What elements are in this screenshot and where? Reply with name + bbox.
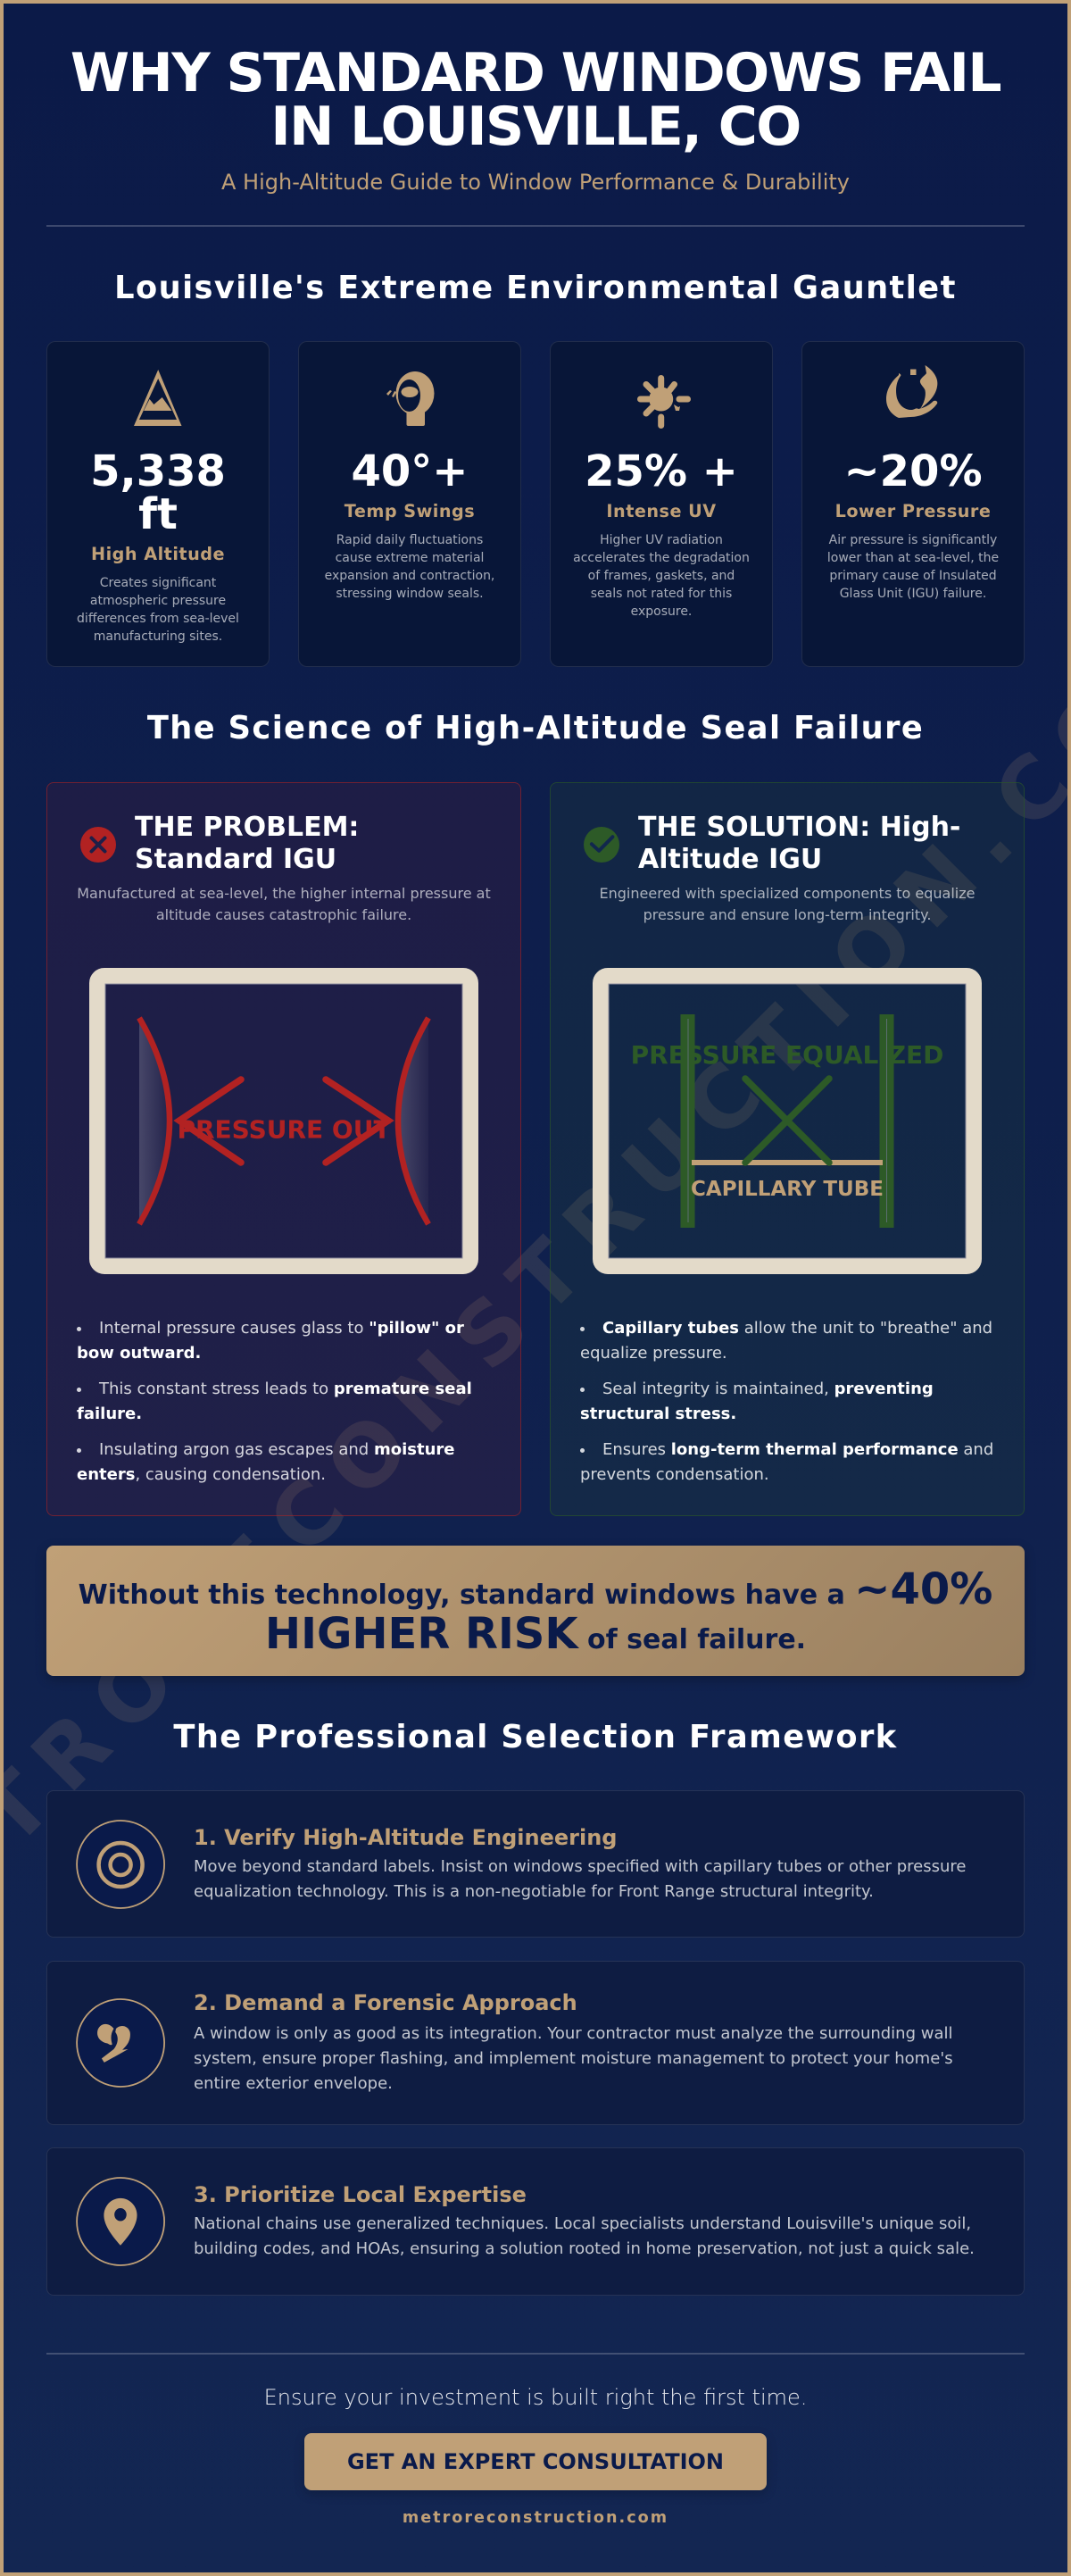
heading: selection framework: The Professional Selection Framework — [173, 1719, 898, 1755]
diagram: pressure equalized window — [593, 968, 982, 1274]
diagram: pressure equalized window: CAPILLARY TUBE — [691, 1178, 884, 1201]
stat description — [77, 576, 239, 644]
problem bullet list: Insulating argon gas escapes and moisture — [99, 1440, 454, 1459]
footer prompt: Ensure your investment is built right the first time. — [264, 2385, 807, 2410]
stat description: Rapid daily fluctuations — [336, 533, 483, 547]
step title: 2. Demand a Forensic Approach — [194, 1990, 577, 2015]
callout: 40 percent higher risk — [46, 1546, 1025, 1676]
step description: National chains use generalized techniques. Local specialists understand Louisville's unique soil, — [194, 2214, 971, 2233]
stat description — [827, 533, 999, 601]
stat description: exposure. — [631, 604, 692, 619]
panel: step 1 — [46, 1790, 1025, 1938]
stat label: Temp Swings — [345, 501, 475, 521]
panel description: pressure and ensure long-term integrity. — [643, 906, 931, 923]
stat description — [325, 533, 494, 601]
step description: Move beyond standard labels. Insist on windows specified with capillary tubes or other pressure — [194, 1857, 966, 1876]
stat description: seals not rated for this — [591, 587, 732, 601]
stat description: expansion and contraction, — [325, 569, 494, 583]
panel: UV stat — [550, 341, 773, 667]
step title: 1. Verify High-Altitude Engineering — [194, 1825, 617, 1850]
diagram: pressure equalized window: PRESSURE EQUALIZED — [631, 1040, 943, 1070]
icon: target — [76, 1820, 165, 1909]
step description: A window is only as good as its integration. Your contractor must analyze the surrounding wall — [194, 2023, 953, 2043]
panel heading: Standard IGU — [135, 844, 336, 875]
step description: entire exterior envelope. — [194, 2073, 393, 2093]
panel description: Engineered with specialized components to equalize — [600, 885, 975, 902]
solution bullet list: equalize pressure. — [580, 1344, 727, 1363]
solution bullet list: prevents condensation. — [580, 1465, 769, 1484]
callout line one: Without this technology, standard windows have a ~40% — [79, 1564, 992, 1614]
panel: pressure stat — [801, 341, 1025, 667]
stat value: ft — [138, 489, 178, 539]
panel description: altitude causes catastrophic failure. — [156, 906, 411, 923]
stat description: primary cause of Insulated — [829, 569, 997, 583]
step description — [194, 2214, 975, 2258]
problem bullet list: Internal pressure causes glass to "pillow" or — [99, 1319, 464, 1338]
title: IN LOUISVILLE, CO — [270, 96, 801, 158]
panel description: Manufactured at sea-level, the higher internal pressure at — [77, 885, 491, 902]
call to action button: GET AN EXPERT CONSULTATION — [347, 2449, 724, 2474]
problem bullet list: bow outward. — [77, 1344, 201, 1363]
solution bullet list — [580, 1319, 993, 1484]
panel heading — [638, 812, 960, 875]
stat description: Air pressure is significantly — [829, 533, 997, 547]
stat value: 25% + — [585, 446, 738, 496]
panel heading: THE SOLUTION: High- — [638, 812, 960, 843]
subtitle: A High-Altitude Guide to Window Performance & Durability — [221, 170, 850, 195]
icon: sun — [637, 375, 691, 429]
title — [71, 42, 1000, 158]
step description: equalization technology. This is a non-negotiable for Front Range structural integrity. — [194, 1882, 874, 1901]
stat description: differences from sea-level — [77, 612, 239, 626]
stat description: Glass Unit (IGU) failure. — [840, 587, 986, 601]
stat label: Lower Pressure — [835, 501, 991, 521]
stat description: Higher UV radiation — [600, 533, 723, 547]
stat description — [573, 533, 750, 619]
panel: the problem — [46, 782, 521, 1516]
step description — [194, 2023, 953, 2093]
stat description: atmospheric pressure — [90, 594, 226, 608]
problem bullet list: This constant stress leads to premature seal — [99, 1380, 472, 1398]
icon: forensic mark — [76, 1998, 165, 2088]
icon: x mark — [80, 827, 116, 863]
panel: high altitude stat — [46, 341, 270, 667]
call to action button — [304, 2433, 767, 2490]
solution bullet list: Ensures long-term thermal performance and — [602, 1440, 993, 1459]
stat description: stressing window seals. — [336, 587, 484, 601]
stat description: lower than at sea-level, the — [827, 551, 999, 565]
icon: temperature — [386, 371, 434, 426]
solution bullet list: Seal integrity is maintained, preventing — [602, 1380, 934, 1398]
callout line two: HIGHER RISK of seal failure. — [265, 1609, 806, 1659]
stat value — [90, 446, 226, 539]
heading: seal failure science: The Science of High-Altitude Seal Failure — [147, 710, 924, 746]
panel description — [600, 885, 975, 923]
solution bullet list: Capillary tubes allow the unit to "breathe" and — [602, 1319, 992, 1338]
panel: temperature stat — [298, 341, 521, 667]
panel: step 2 — [46, 1961, 1025, 2125]
stat label: High Altitude — [91, 544, 225, 564]
stat description: of frames, gaskets, and — [588, 569, 735, 583]
stat description: cause extreme material — [336, 551, 484, 565]
stat value: 5,338 — [90, 446, 226, 496]
step description: system, ensure proper flashing, and implement moisture management to protect your home's — [194, 2048, 953, 2068]
diagram: pressure out window — [89, 968, 478, 1274]
problem bullet list: failure. — [77, 1405, 142, 1423]
step title: 3. Prioritize Local Expertise — [194, 2182, 527, 2207]
step description — [194, 1857, 966, 1901]
stat label: Intense UV — [606, 501, 717, 521]
panel: step 3 — [46, 2147, 1025, 2295]
panel description — [77, 885, 491, 923]
icon: pressure swirl — [886, 365, 937, 418]
panel heading: Altitude IGU — [638, 844, 822, 875]
stat description: manufacturing sites. — [94, 629, 222, 644]
problem bullet list: enters, causing condensation. — [77, 1465, 326, 1484]
panel: the solution — [550, 782, 1025, 1516]
problem bullet list — [77, 1319, 472, 1484]
stat description: accelerates the degradation — [573, 551, 750, 565]
step description: building codes, and HOAs, ensuring a solution rooted in home preservation, not just a quick sale. — [194, 2239, 975, 2258]
icon: check mark — [584, 827, 619, 863]
solution bullet list: structural stress. — [580, 1405, 736, 1423]
heading: environmental gauntlet: Louisville's Extreme Environmental Gauntlet — [114, 270, 957, 306]
icon: mountain — [134, 370, 182, 426]
stat value: 40°+ — [351, 446, 468, 496]
title: WHY STANDARD WINDOWS FAIL — [71, 42, 1000, 104]
diagram: pressure out window: PRESSURE OUT — [177, 1114, 391, 1145]
panel heading: THE PROBLEM: — [135, 812, 359, 843]
stat value: ~20% — [843, 446, 983, 496]
panel heading — [135, 812, 359, 875]
icon: map pin — [76, 2177, 165, 2266]
stat description: Creates significant — [100, 576, 216, 590]
website: metroreconstruction.com — [403, 2509, 668, 2527]
